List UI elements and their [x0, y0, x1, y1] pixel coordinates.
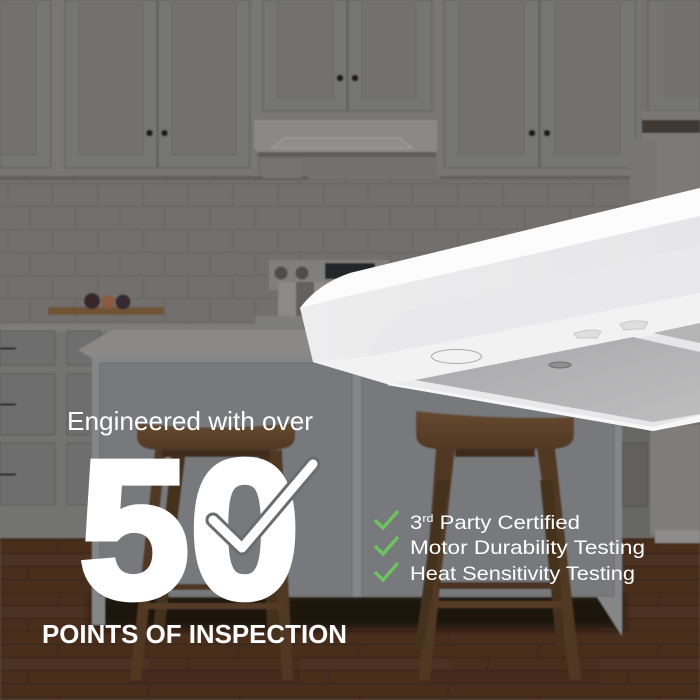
right upper cabinet	[437, 0, 640, 179]
big number 50 with check mark	[79, 420, 313, 639]
item: 3rd party certified: 3	[410, 512, 421, 534]
hood top bright band	[300, 188, 700, 308]
kitchen island	[78, 330, 622, 636]
white under-cabinet range hood	[300, 188, 700, 431]
hood curved front panel	[368, 245, 700, 360]
left base cabinets	[0, 331, 100, 542]
number 50: 50	[79, 420, 300, 639]
hood light button	[432, 350, 482, 364]
item: 3rd party certified	[375, 511, 580, 534]
middle upper cabinet	[257, 0, 437, 120]
hood lower control strip	[313, 293, 700, 384]
island shadow on floor	[92, 596, 622, 628]
hood vent light	[549, 362, 571, 368]
rear filter panel	[653, 323, 700, 343]
hood switch right	[620, 321, 648, 330]
check mark	[213, 464, 313, 548]
range hood in background	[254, 120, 440, 178]
right stool	[415, 411, 581, 680]
hood front lip	[387, 383, 700, 431]
countertop back	[0, 324, 330, 332]
certification checklist	[375, 511, 645, 585]
stove and pot	[255, 260, 389, 326]
brick backsplash	[0, 178, 640, 328]
subheading: points of inspection: POINTS OF INSPECTION	[42, 621, 347, 649]
grey filter panel	[415, 337, 700, 422]
left stool	[130, 423, 295, 680]
hood switch left	[574, 330, 601, 338]
item: heat sensitivity testing: Heat Sensitivity Testing	[410, 563, 635, 585]
item: 3rd party certified: rd	[422, 513, 433, 525]
floor	[0, 538, 700, 700]
far right cabinet and fridge	[630, 0, 700, 203]
cutting board with figs	[48, 293, 164, 315]
item: 3rd party certified: Party Certified	[433, 512, 580, 534]
left upper cabinets	[0, 0, 308, 180]
heading: engineered with over: Engineered with over	[67, 406, 313, 436]
wall backdrop	[0, 0, 700, 345]
item: motor durability testing: Motor Durability Testing	[410, 537, 645, 559]
right base cabinets and fridge base	[620, 425, 700, 543]
hood body	[300, 188, 700, 431]
